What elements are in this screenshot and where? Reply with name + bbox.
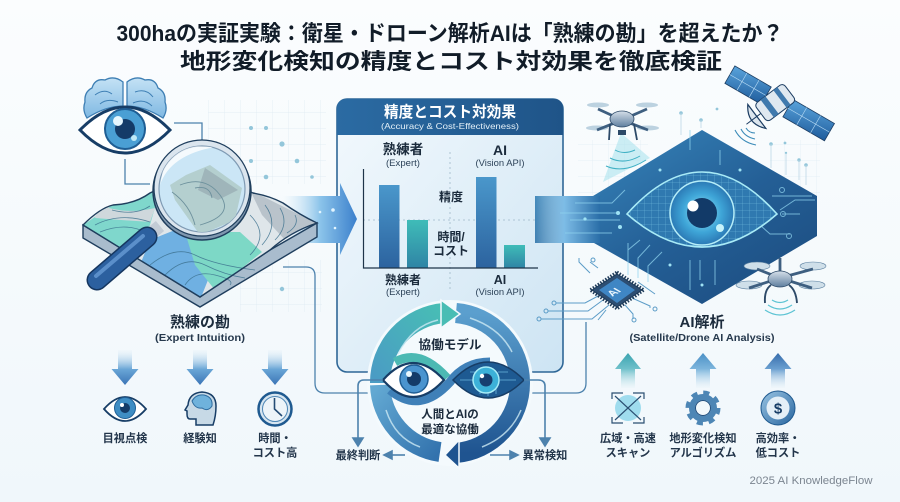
arrows: AI up xyxy=(615,353,792,388)
chart labels: (Vision API) xyxy=(476,287,524,297)
title: 300haの実証実験：衛星・ドローン解析AIは「熟練の勘」を超えたか？ xyxy=(116,21,784,46)
cycle text: 人間とAIの xyxy=(421,408,479,421)
title: 地形変化検知の精度とコスト対効果を徹底検証 xyxy=(180,49,722,74)
panel header: 精度とコスト対効果 xyxy=(384,102,516,121)
chart labels xyxy=(383,141,524,297)
heading: expert intuition: 熟練の勘 xyxy=(170,313,230,331)
icon: topographic map xyxy=(82,191,319,308)
human eye in cycle xyxy=(383,363,444,397)
outcome labels: 最終判断 xyxy=(336,448,380,462)
icon: dollar coin xyxy=(761,391,795,425)
expert labels: コスト高 xyxy=(253,446,297,460)
chart labels: (Vision API) xyxy=(476,158,524,168)
icon: drone bottom xyxy=(736,258,826,315)
eye mesh xyxy=(626,171,778,248)
infinity ribbon xyxy=(390,358,490,401)
panel header: (Accuracy & Cost-Effectiveness) xyxy=(381,121,519,131)
bar chart xyxy=(364,169,538,268)
panel header xyxy=(337,99,563,135)
expert labels: 時間・ xyxy=(258,431,292,445)
chart labels: (Expert) xyxy=(386,158,420,168)
AI eye in cycle xyxy=(453,362,524,398)
icon: drone top xyxy=(586,102,659,182)
icon: brain xyxy=(84,78,166,118)
panel: accuracy and cost-effectiveness xyxy=(337,99,563,372)
collaboration model cycle xyxy=(336,300,567,468)
footer credit: 2025 AI KnowledgeFlow xyxy=(750,475,873,487)
AI labels: 地形変化検知 xyxy=(669,431,737,445)
chart labels: コスト xyxy=(433,244,469,258)
icon: scan xyxy=(612,393,644,423)
icon: magnifying glass xyxy=(96,140,251,280)
outcome labels xyxy=(336,448,567,462)
arrow: anomaly detection xyxy=(490,380,550,459)
heading: AI analysis: (Satellite/Drone AI Analysis) xyxy=(630,333,774,344)
cycle text: 最適な協働 xyxy=(421,422,479,436)
heading: expert intuition xyxy=(155,313,245,344)
icon: clock xyxy=(258,392,292,426)
heading: AI analysis xyxy=(630,313,774,344)
icon: visual inspection eye xyxy=(104,397,146,421)
ring arrows xyxy=(380,313,520,453)
heading: expert intuition: (Expert Intuition) xyxy=(155,333,245,344)
heading: AI analysis: AI解析 xyxy=(679,313,725,331)
icon: gear xyxy=(688,393,718,423)
icon: AI chip xyxy=(537,258,657,322)
chart labels: AI xyxy=(494,273,506,287)
chart labels: AI xyxy=(493,142,507,158)
chart labels: 時間/ xyxy=(437,229,465,244)
AI labels xyxy=(600,431,800,460)
outcome labels: 異常検知 xyxy=(523,448,567,462)
AI labels: 低コスト xyxy=(756,446,800,460)
chart labels: 精度 xyxy=(439,189,463,204)
chart labels: 熟練者 xyxy=(385,272,421,287)
expert labels: 経験知 xyxy=(183,431,217,445)
title xyxy=(116,21,784,74)
expert labels: 目視点検 xyxy=(103,431,148,445)
arrows: expert down xyxy=(112,350,288,385)
icon: satellite xyxy=(725,66,834,145)
icon: dollar coin: $ xyxy=(774,400,783,418)
AI labels: 高効率・ xyxy=(756,431,800,445)
icon: head with brain xyxy=(185,392,216,425)
arrow: expert to panel xyxy=(283,183,357,255)
icon: AI eye hexagon xyxy=(535,130,817,304)
AI labels: アルゴリズム xyxy=(670,446,736,460)
chart labels: (Expert) xyxy=(386,287,420,297)
icon: AI chip: AI xyxy=(605,287,624,298)
AI labels: 広域・高速 xyxy=(600,431,656,445)
expert labels xyxy=(103,431,297,460)
arrow: final decision xyxy=(353,380,405,459)
chart labels: 熟練者 xyxy=(383,141,423,157)
cycle text: 協働モデル xyxy=(418,337,482,352)
icon: human eye xyxy=(80,107,170,153)
cycle text xyxy=(418,337,482,436)
AI labels: スキャン xyxy=(606,448,650,460)
connector lines xyxy=(125,123,586,393)
